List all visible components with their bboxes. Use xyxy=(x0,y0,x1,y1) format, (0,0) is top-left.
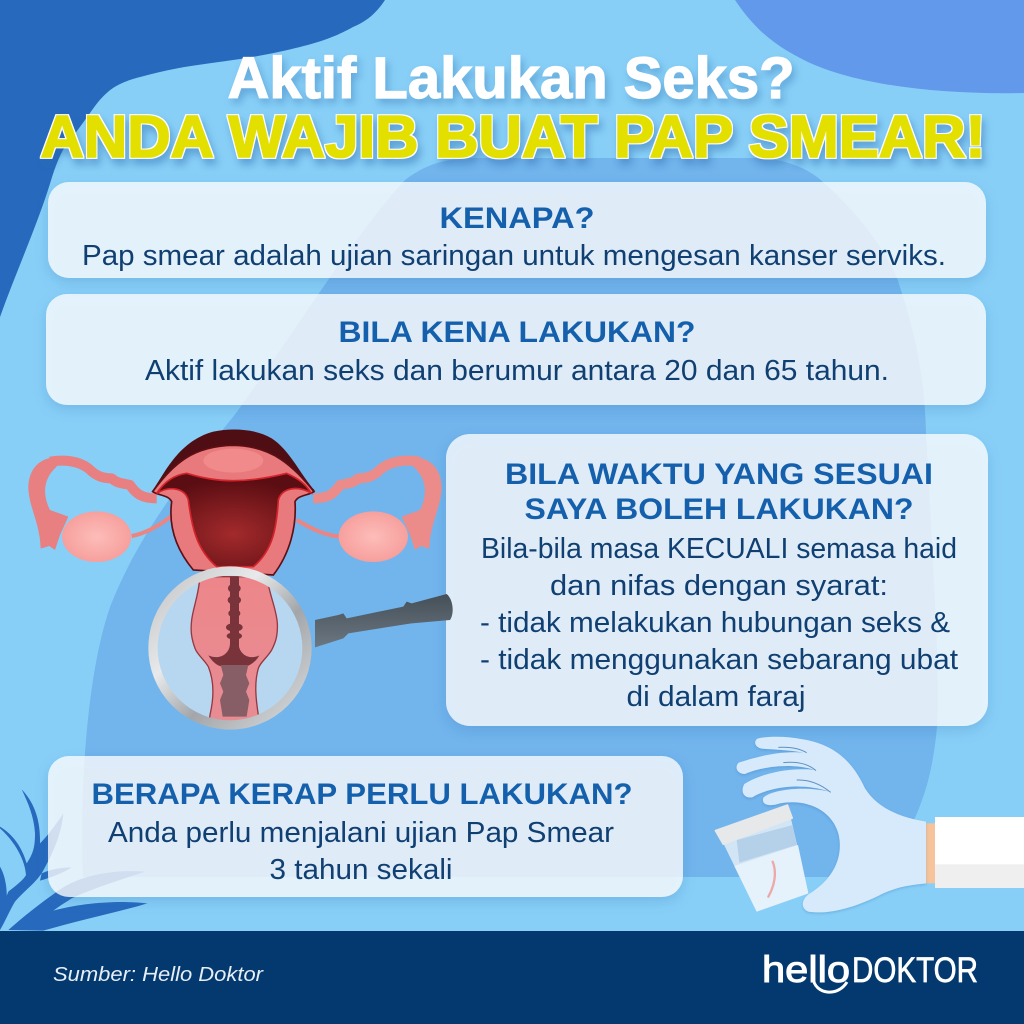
text: berapa kerap body: 3 tahun sekali xyxy=(270,854,452,886)
ovary: left xyxy=(62,511,131,562)
sample cup xyxy=(716,805,808,912)
cuff xyxy=(925,823,935,883)
glove xyxy=(737,737,926,912)
heading: bila waktu xyxy=(505,458,933,526)
ligaments xyxy=(132,516,343,537)
heading: bila kena lakukan: BILA KENA LAKUKAN? xyxy=(338,316,696,349)
logo: hello doktor: DOKTOR xyxy=(852,951,978,990)
footer bar xyxy=(0,931,1024,1024)
heading: bila waktu: SAYA BOLEH LAKUKAN? xyxy=(524,493,914,526)
background blob: top right xyxy=(735,0,1024,93)
logo: hello doktor xyxy=(762,949,978,992)
finger creases xyxy=(778,747,831,792)
title line 1: Aktif Lakukan Seks? xyxy=(228,46,794,111)
specimen xyxy=(768,862,775,897)
icon: palm leaves xyxy=(0,789,147,931)
background blob: top left xyxy=(0,0,385,317)
text: bila waktu body: dan nifas dengan syarat: xyxy=(550,570,888,602)
liquid xyxy=(734,845,808,912)
text: bila waktu body: - tidak menggunakan sebarang ubat xyxy=(480,644,958,676)
background blob: centre xyxy=(82,158,938,877)
heading: bila waktu: BILA WAKTU YANG SESUAI xyxy=(505,458,933,491)
lens xyxy=(153,571,307,725)
panel: bila kena lakukan xyxy=(46,294,986,405)
illustration: uterus with magnifying glass xyxy=(28,429,453,727)
title line 2: ANDA WAJIB BUAT PAP SMEAR! xyxy=(40,104,986,170)
panel: kenapa xyxy=(48,182,986,278)
text: bila waktu body: di dalam faraj xyxy=(626,681,806,713)
text: kenapa body: Pap smear adalah ujian saringan untuk mengesan kanser serviks. xyxy=(82,240,946,272)
text: berapa kerap body xyxy=(108,817,615,886)
source text: Sumber: Hello Doktor xyxy=(53,964,264,986)
text: bila waktu body: Bila-bila masa KECUALI semasa haid xyxy=(481,533,957,565)
sleeve xyxy=(935,817,1024,888)
fallopian tube: left xyxy=(28,457,157,550)
heading: berapa kerap: BERAPA KERAP PERLU LAKUKAN? xyxy=(92,778,632,811)
magnifying glass handle xyxy=(315,594,453,647)
fundus highlight xyxy=(203,449,263,473)
text: bila waktu body xyxy=(480,533,958,713)
lens rim xyxy=(153,571,307,725)
ovary: right xyxy=(339,511,408,562)
cup lid xyxy=(716,805,792,844)
uterus cap xyxy=(152,429,315,500)
text: bila waktu body: - tidak melakukan hubungan seks & xyxy=(480,607,950,639)
lower canal xyxy=(220,665,249,717)
heading: kenapa: KENAPA? xyxy=(440,202,594,235)
cervical canal xyxy=(208,577,259,667)
panel: berapa kerap xyxy=(48,756,683,897)
logo: hello doktor: hello xyxy=(762,949,850,990)
text: berapa kerap body: Anda perlu menjalani ujian Pap Smear xyxy=(108,817,615,849)
uterus body xyxy=(153,445,314,575)
fallopian tube: right xyxy=(313,457,442,550)
illustration: gloved hand with sample cup xyxy=(716,737,1024,912)
magnified uterus xyxy=(191,577,277,727)
panel: bila waktu xyxy=(446,434,988,726)
title xyxy=(40,46,986,170)
text: bila kena body: Aktif lakukan seks dan berumur antara 20 dan 65 tahun. xyxy=(145,355,889,387)
uterine cavity xyxy=(157,473,311,567)
